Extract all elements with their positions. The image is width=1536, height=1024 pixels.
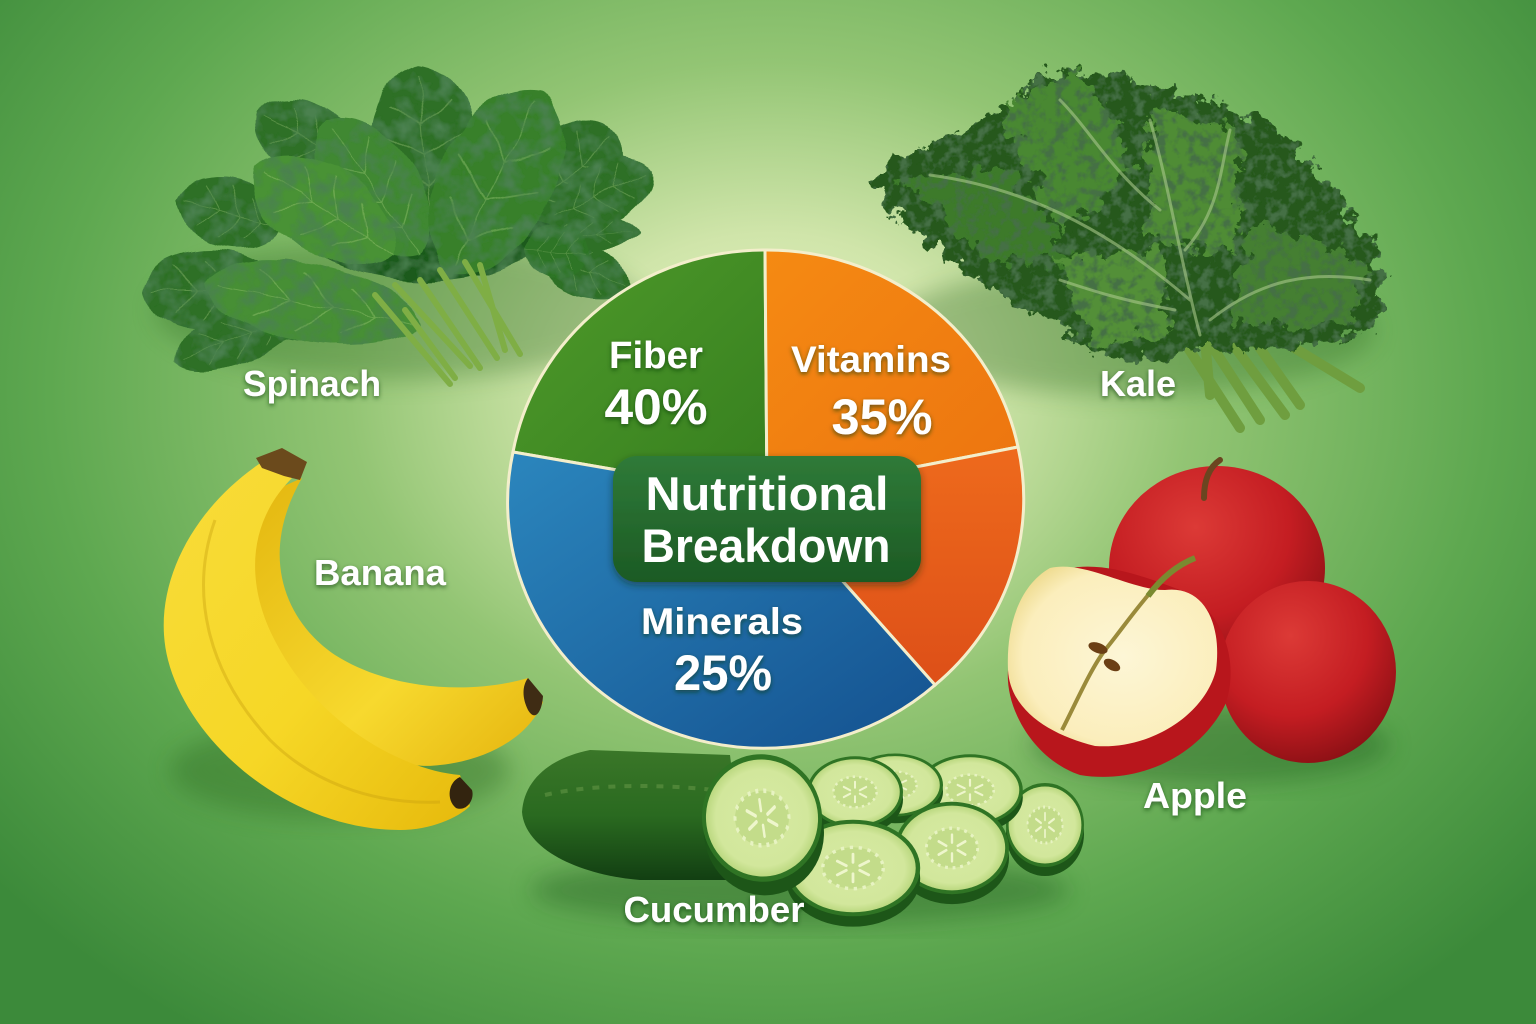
label: kale: Kale [1100, 363, 1176, 404]
spinach stems [375, 262, 520, 384]
label: apple: Apple [1143, 775, 1247, 816]
cucumber slices [694, 746, 1084, 927]
label: cucumber: Cucumber [624, 889, 804, 930]
label: banana: Banana [314, 552, 447, 593]
right apple [1220, 581, 1396, 763]
kale stems [1150, 320, 1360, 428]
spinach inner shadow mass [290, 138, 560, 282]
minerals label: Minerals [641, 601, 803, 642]
back banana [249, 478, 543, 766]
pie labels [604, 335, 951, 701]
food labels [243, 363, 1247, 930]
back apple [1109, 460, 1325, 670]
spinach leaves [140, 61, 663, 387]
slice: vitamins [765, 250, 1018, 496]
food: cucumber [522, 746, 1084, 927]
minerals value: 25% [674, 645, 772, 701]
food: banana [164, 448, 543, 830]
title [642, 467, 890, 572]
title: Breakdown [642, 519, 890, 572]
food: apple [1008, 460, 1396, 785]
front banana [164, 462, 473, 830]
cut apple [1008, 558, 1231, 777]
slice: fiber [513, 250, 767, 496]
vitamins label: Vitamins [791, 339, 951, 380]
kale ribs [930, 100, 1370, 335]
whole cucumber [522, 750, 745, 880]
slice: minerals [508, 452, 935, 748]
spinach front leaves [193, 65, 592, 363]
title: Nutritional [646, 467, 888, 520]
fiber label: Fiber [609, 335, 703, 377]
slice: extra orange-red [767, 447, 1024, 685]
pie chart [508, 250, 1024, 748]
food: spinach [140, 61, 663, 387]
label: spinach: Spinach [243, 363, 381, 404]
fiber value: 40% [604, 379, 708, 435]
kale foliage [868, 70, 1382, 359]
banana stem [256, 448, 307, 480]
center title panel [613, 456, 921, 582]
spinach back leaves [140, 61, 663, 387]
food: kale [868, 70, 1382, 428]
vitamins value: 35% [832, 389, 932, 445]
